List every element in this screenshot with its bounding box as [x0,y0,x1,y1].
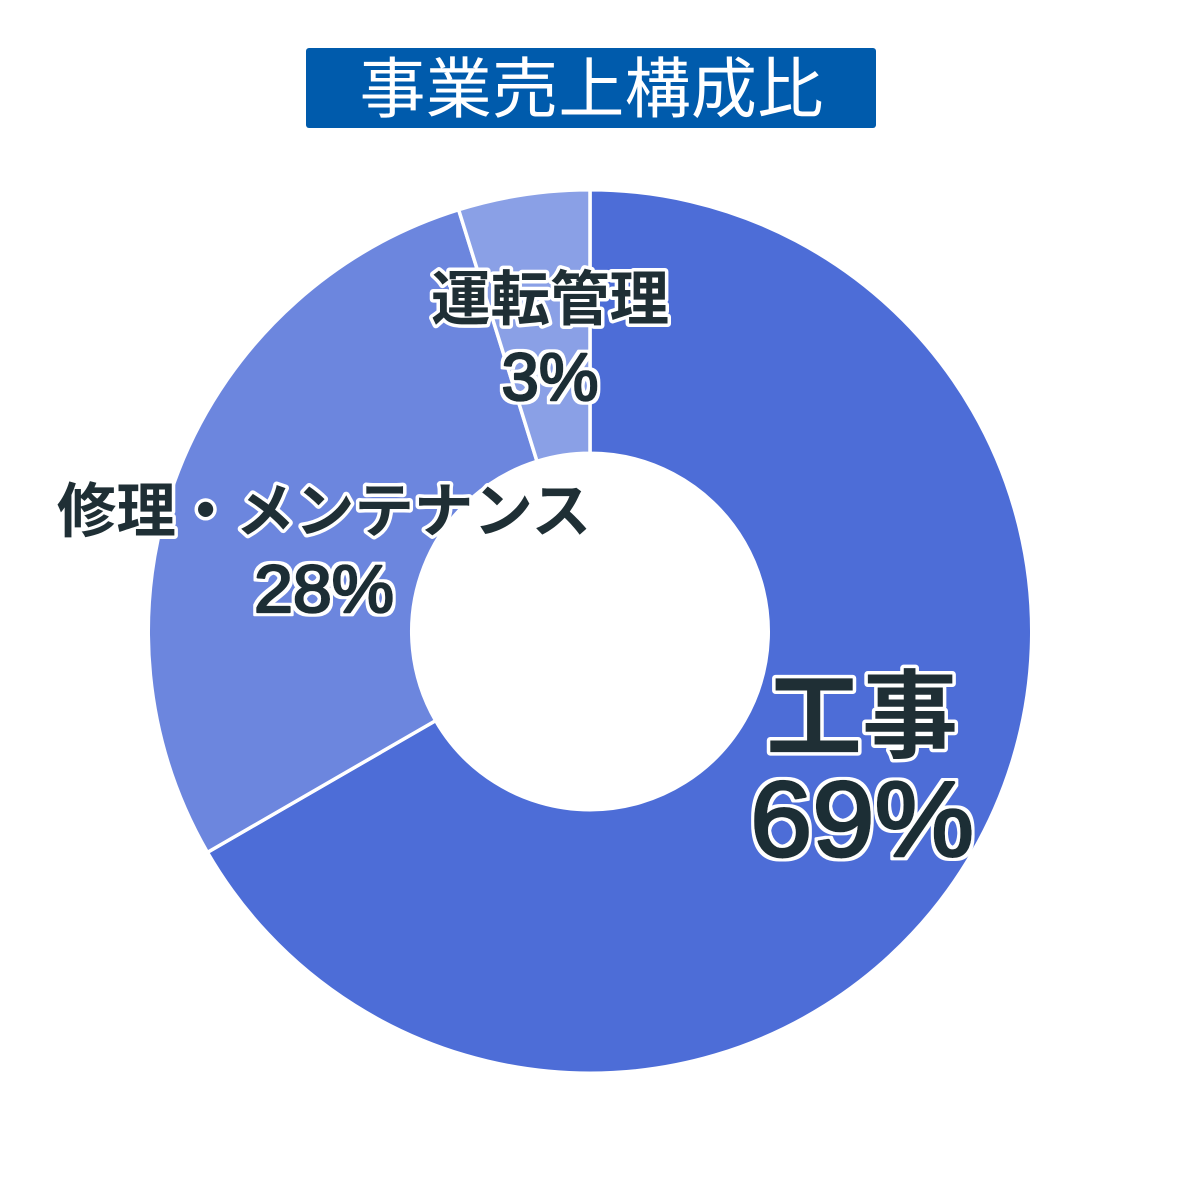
slice: 運転管理 [459,190,590,461]
slice: 工事 [207,190,1032,1073]
title: 事業売上構成比 [359,52,824,126]
label: 運転管理 3% [431,266,669,415]
label: 工事 69%: 工事 [766,664,958,771]
label: 運転管理 3%: 運転管理 [431,266,669,333]
slice: 修理・メンテナンス [148,210,537,852]
donut chart [148,190,1032,1073]
label: 修理・メンテナンス 28%: 修理・メンテナンス [57,478,591,545]
label: 工事 69%: 69% [750,759,974,879]
label: 修理・メンテナンス 28%: 28% [254,552,394,627]
label: 運転管理 3%: 3% [502,340,598,415]
label: 工事 69% [750,664,974,879]
label: 修理・メンテナンス 28% [57,478,591,627]
